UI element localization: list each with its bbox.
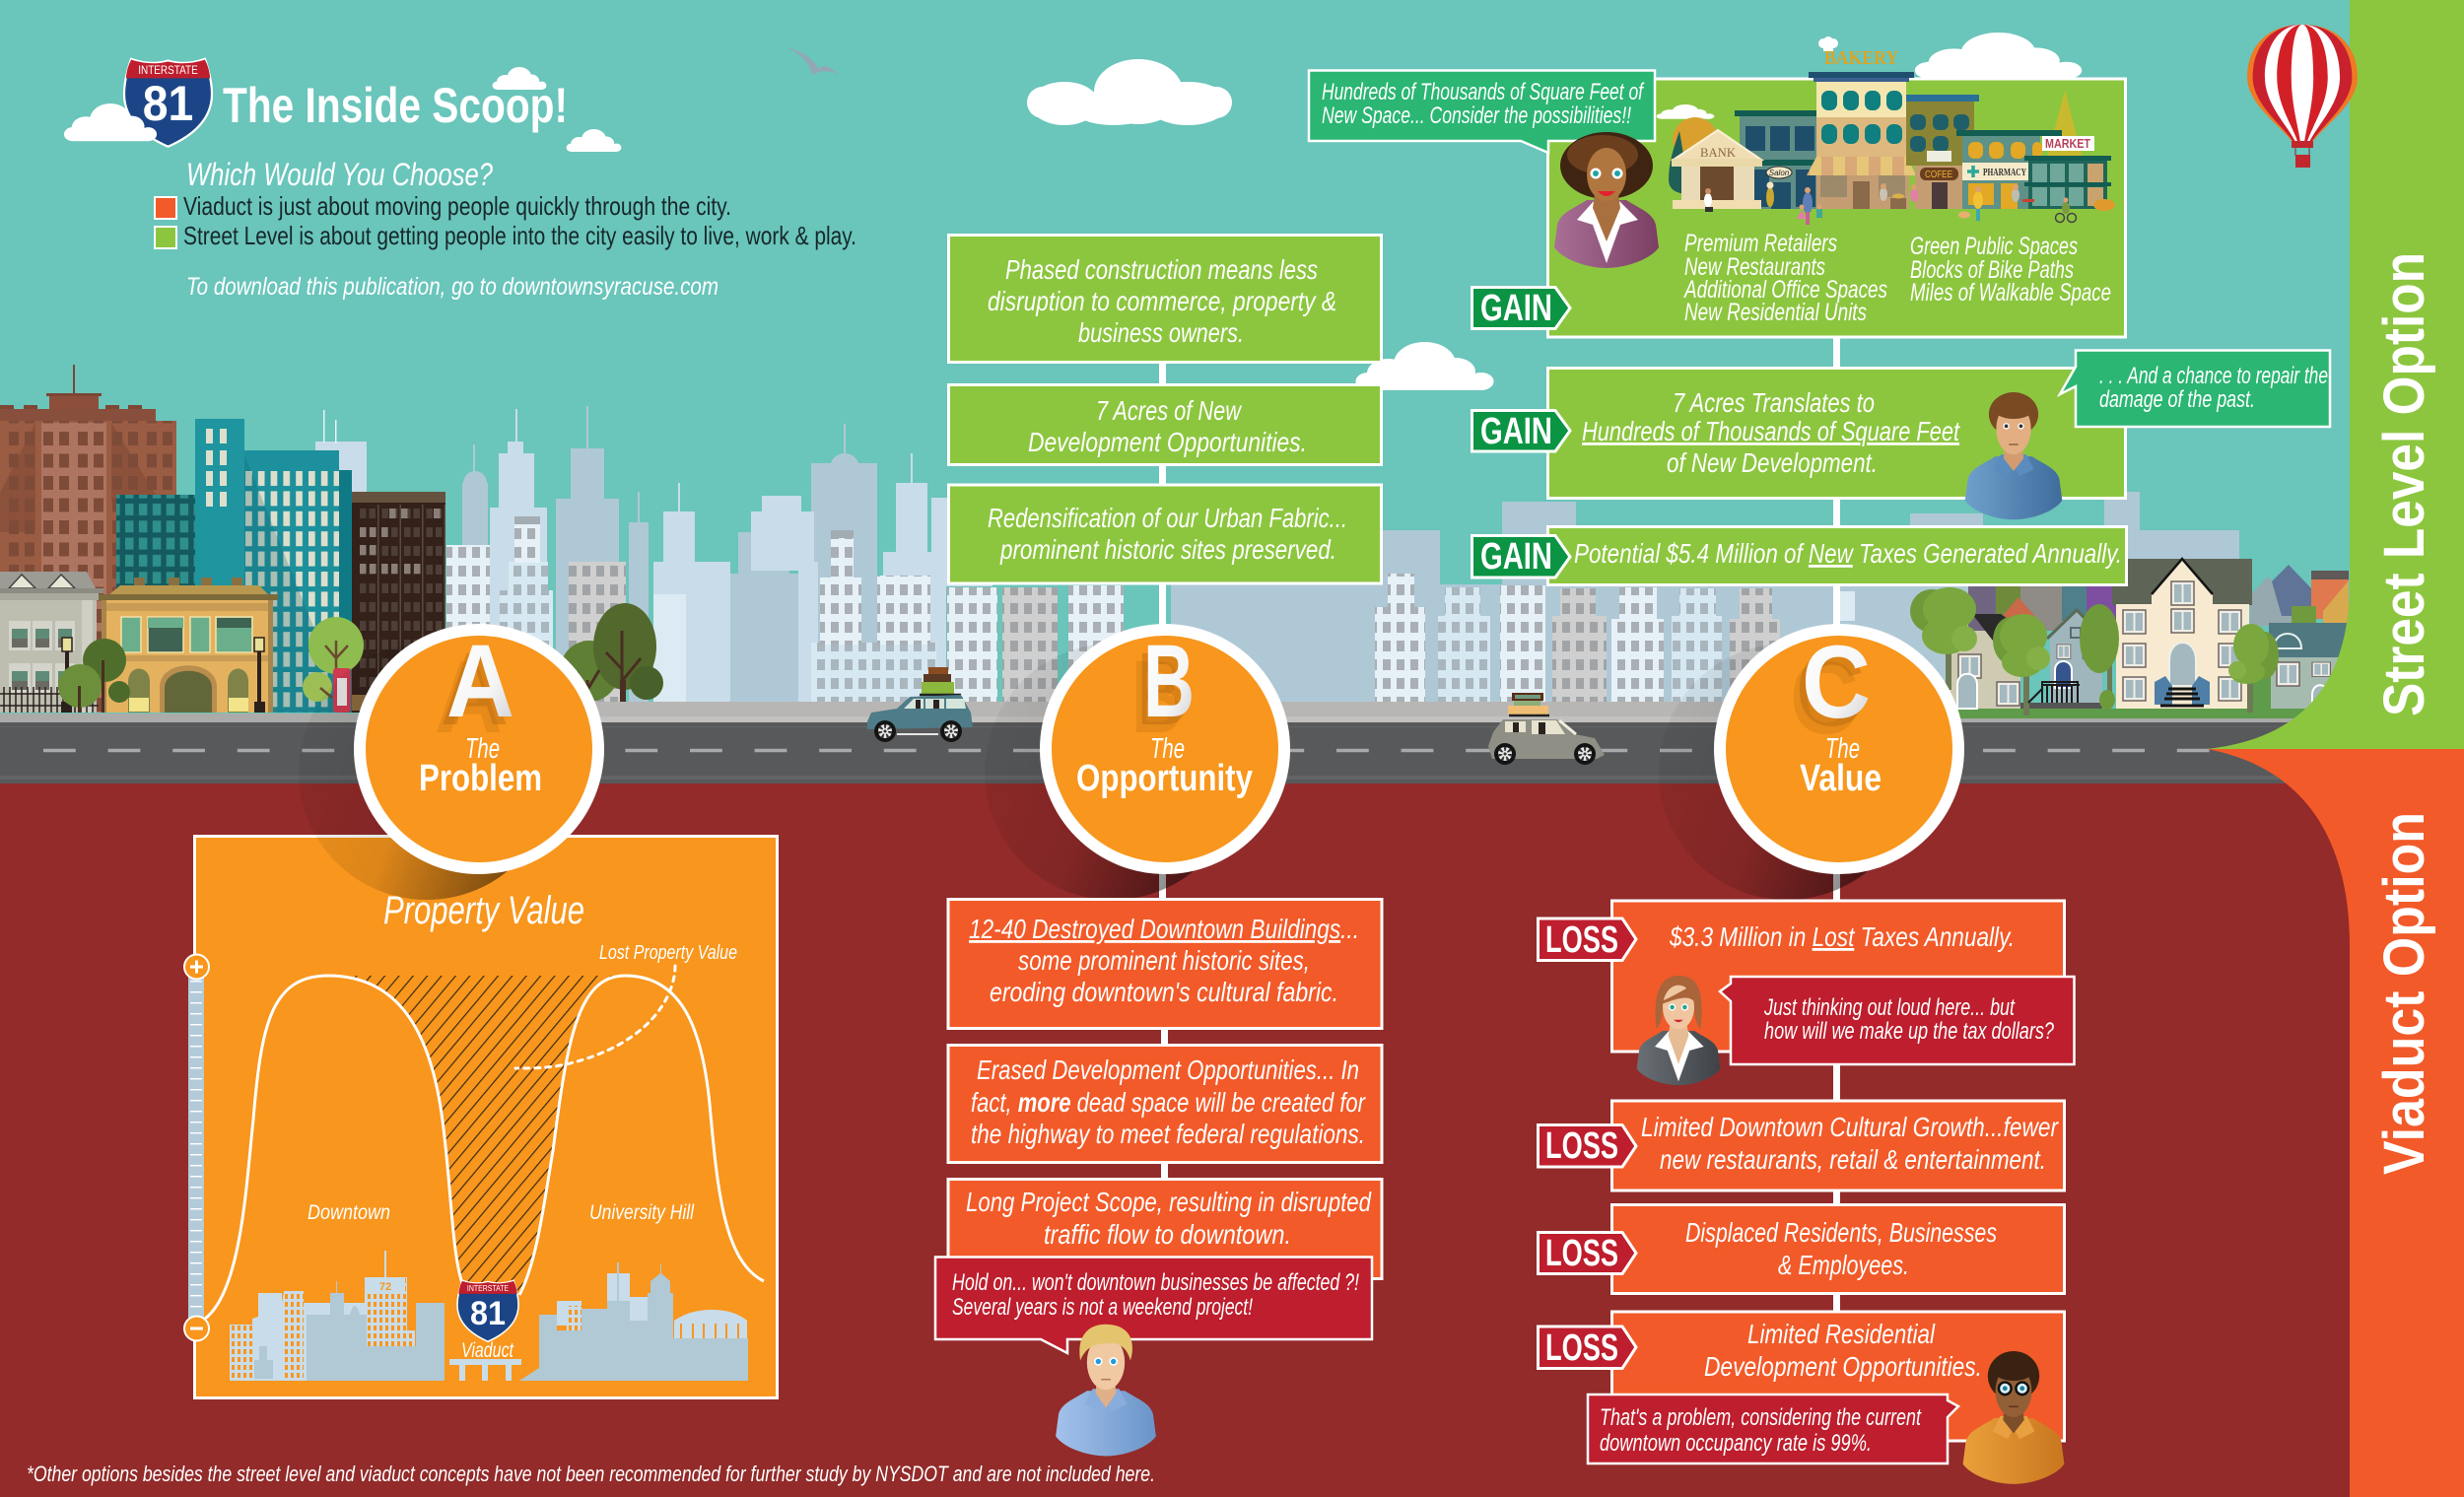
box: displaced residents: Displaced Residents, Businesses — [1685, 1217, 1997, 1248]
callout: repair the past: . . . And a chance to repair the — [2099, 363, 2328, 389]
person: blond man — [1056, 1325, 1156, 1456]
tan house — [1950, 614, 2045, 709]
roadway — [0, 702, 2365, 783]
sky background — [0, 0, 2464, 788]
loss connectors — [1833, 1191, 1840, 1311]
lamp posts — [61, 638, 265, 713]
gain tag 2: GAIN — [1480, 411, 1552, 452]
box: limited residential — [1612, 1312, 2064, 1441]
box: new space with town illustration: Miles of Walkable Space — [1910, 279, 2111, 306]
box: limited residential: Development Opportunities. — [1704, 1351, 1982, 1382]
opportunity: Opportunity — [1076, 758, 1253, 799]
loss tag 3: LOSS — [1545, 1233, 1618, 1274]
box: destroyed buildings: eroding downtown's cultural fabric. — [990, 977, 1338, 1007]
panel: street level value — [1309, 36, 2330, 585]
hatched lost value area — [328, 976, 625, 1295]
box: phased construction: business owners. — [1078, 317, 1244, 348]
tan shop building — [99, 578, 278, 713]
letter C: C — [1802, 625, 1871, 740]
panel: opportunity risks — [935, 899, 1382, 1456]
problem: Problem — [419, 758, 542, 799]
left trees — [58, 639, 130, 713]
box: redensification: Redensification of our Urban Fabric... — [988, 503, 1347, 533]
box: seven acres: 7 Acres of New — [1096, 395, 1242, 426]
letter A: A — [441, 632, 509, 747]
viaduct option label: Viaduct Option — [2372, 812, 2436, 1175]
box: destroyed buildings — [948, 899, 1382, 1029]
the: The — [465, 733, 500, 765]
badge A — [360, 624, 598, 868]
person: woman with curly hair — [1554, 132, 1659, 268]
callout: repair the past — [2060, 351, 2330, 427]
letter B: B — [1143, 624, 1195, 739]
downtown silhouette: 72 — [379, 1281, 391, 1293]
box: seven acres translate: Hundreds of Thousands of Square Feet — [1582, 416, 1960, 446]
value curve left — [205, 976, 462, 1319]
downtown silhouette — [230, 1251, 445, 1381]
salon sign — [1766, 167, 1792, 178]
chart shield: 81 — [470, 1295, 506, 1332]
box: destroyed buildings: 12-40 Destroyed Downtown Buildings... — [969, 914, 1359, 944]
grey neoclassical building — [0, 572, 103, 713]
street level option label: Street Level Option — [2372, 252, 2436, 716]
chart title: Property Value — [383, 889, 584, 932]
box: seven acres translate — [1547, 369, 2125, 499]
download note: To download this publication, go to downtownsyracuse.com — [186, 273, 719, 301]
interstate 81 shield — [124, 59, 212, 147]
gain tag 3: GAIN — [1480, 536, 1552, 578]
olive building — [1906, 95, 1979, 209]
letter B: B — [1131, 640, 1183, 755]
connectors — [1159, 338, 1840, 1311]
left downtown buildings — [0, 365, 663, 713]
box: new space with town illustration: Blocks of Bike Paths — [1910, 256, 2074, 284]
the: The — [1150, 733, 1185, 765]
box: erased opportunities: the highway to meet federal regulations. — [971, 1119, 1365, 1149]
footnote: *Other options besides the street level and viaduct concepts have not been recommended for further study by NYSDOT and are not included here. — [27, 1462, 1155, 1486]
box: long project scope — [948, 1179, 1382, 1279]
dotted leader — [515, 966, 675, 1068]
panel: viaduct value losses — [1538, 901, 2074, 1484]
brown high-rise — [0, 365, 176, 713]
loss tag 4: LOSS — [1545, 1327, 1618, 1369]
header — [64, 59, 856, 301]
loss tag 1: LOSS — [1545, 919, 1618, 961]
callout: possibilities — [1309, 71, 1655, 153]
value scale — [184, 954, 209, 1340]
box: new space with town illustration: New Residential Units — [1684, 299, 1867, 326]
box: lost taxes: $3.3 Million in Lost Taxes Annually. — [1669, 921, 2015, 952]
main title: The Inside Scoop! — [223, 78, 568, 133]
residential houses — [1910, 559, 2349, 715]
letter C: C — [1790, 641, 1859, 756]
light green tree and phone booth — [303, 617, 366, 713]
callout: tax dollars: Just thinking out loud here... but — [1763, 994, 2016, 1021]
box: phased construction: disruption to commerce, property & — [988, 286, 1336, 316]
label downtown: Downtown — [308, 1201, 390, 1224]
interstate 81 shield: 81 — [143, 76, 193, 131]
chart shield: INTERSTATE — [467, 1284, 510, 1293]
panel: property value chart — [184, 836, 777, 1397]
gain tag 1: GAIN — [1480, 288, 1552, 329]
stoop railing — [2028, 682, 2080, 703]
hot air balloon — [2247, 25, 2358, 168]
letter A: A — [435, 640, 503, 755]
label lost value: Lost Property Value — [599, 942, 737, 964]
callout: occupancy: That's a problem, considering the current — [1600, 1404, 1922, 1431]
pale window buildings — [446, 516, 1855, 714]
callout: hold on: Several years is not a weekend project! — [952, 1294, 1253, 1321]
box: phased construction — [948, 235, 1382, 363]
teal roof house — [2269, 623, 2349, 709]
callout: possibilities: New Space... Consider the possibilities!! — [1322, 102, 1631, 129]
person: woman in suit — [1637, 976, 1720, 1085]
box: erased opportunities: fact, more dead space will be created for — [971, 1087, 1366, 1118]
bird — [786, 47, 839, 75]
legend: street level: Street Level is about getting people into the city easily to live, work & play. — [183, 221, 856, 250]
wide teal building — [244, 450, 352, 713]
box: new space with town illustration: Premium Retailers — [1684, 230, 1837, 257]
the: The — [1825, 733, 1860, 765]
box: new taxes: Potential $5.4 Million of New Taxes Generated Annually. — [1574, 538, 2122, 569]
box: new space with town illustration: New Restaurants — [1684, 253, 1825, 281]
bank — [1672, 130, 1762, 209]
distant skyline — [315, 406, 2239, 719]
box: redensification: prominent historic sites preserved. — [999, 534, 1336, 565]
chart shield — [457, 1280, 518, 1341]
decorative clouds — [1027, 33, 2082, 390]
label university hill: University Hill — [589, 1201, 695, 1224]
market sign: MARKET — [2045, 136, 2090, 151]
badge B — [1046, 624, 1284, 868]
iron fence — [0, 687, 99, 713]
box: long project scope: Long Project Scope, resulting in disrupted — [966, 1187, 1372, 1217]
box: long project scope: traffic flow to downtown. — [1044, 1219, 1291, 1250]
plus — [184, 954, 209, 980]
pharmacy sign — [1962, 163, 2028, 180]
viaduct side banner — [2207, 749, 2464, 1497]
street trees beside circle A — [560, 603, 663, 713]
label viaduct: Viaduct — [461, 1339, 514, 1362]
person: man with curly hair — [1965, 392, 2062, 519]
legend: viaduct: Viaduct is just about moving people quickly through the city. — [183, 191, 731, 221]
callout: possibilities: Hundreds of Thousands of Square Feet of — [1322, 79, 1645, 105]
cream house — [2112, 559, 2252, 709]
connectors between boxes — [1161, 1029, 1168, 1178]
box: destroyed buildings: some prominent historic sites, — [1018, 945, 1310, 976]
bank: BANK — [1700, 145, 1737, 160]
box: new space with town illustration — [1547, 36, 2125, 337]
letter A: A — [446, 624, 514, 739]
box: limited cultural growth — [1612, 1101, 2064, 1191]
bakery building — [1807, 72, 1916, 209]
box: erased opportunities: Erased Development Opportunities... In — [977, 1055, 1359, 1085]
letter B: B — [1137, 632, 1189, 747]
box: new space with town illustration: Green Public Spaces — [1910, 233, 2078, 260]
box: limited residential: Limited Residential — [1747, 1319, 1936, 1349]
subtitle: Which Would You Choose? — [186, 157, 493, 192]
town illustration — [1657, 36, 2115, 225]
box: lost taxes — [1612, 901, 2064, 1052]
badge C — [1720, 625, 1958, 868]
box: displaced residents — [1612, 1204, 2064, 1293]
blue-grey house — [2020, 610, 2109, 709]
pharmacy building — [1956, 130, 2062, 209]
bakery sign: BAKERY — [1824, 47, 1898, 69]
teal shop — [1735, 110, 1817, 209]
car: grey hatchback — [1488, 693, 1605, 765]
dark brown tower — [352, 492, 445, 713]
box: seven acres translate: 7 Acres Translates to — [1673, 387, 1875, 418]
box: redensification — [948, 485, 1382, 583]
viaduct bridge — [449, 1359, 521, 1381]
circle shadows — [299, 644, 1915, 900]
value: Value — [1800, 758, 1882, 799]
callout: repair the past: damage of the past. — [2099, 386, 2255, 413]
university hill silhouette — [519, 1262, 748, 1381]
panel: opportunity benefits — [948, 235, 1382, 583]
box: new space with town illustration: Additional Office Spaces — [1682, 276, 1887, 304]
callout: hold on — [935, 1258, 1372, 1353]
dark teal building — [116, 495, 195, 713]
teal tower — [195, 419, 244, 713]
leafy trees — [1910, 587, 2279, 715]
minus — [184, 1317, 209, 1340]
callout: tax dollars: how will we make up the tax dollars? — [1764, 1018, 2054, 1045]
value curve right — [519, 976, 764, 1295]
coffee sign: COFEE — [1925, 170, 1952, 180]
box: limited cultural growth: new restaurants, retail & entertainment. — [1660, 1144, 2046, 1175]
callout: hold on: Hold on... won't downtown businesses be affected ?! — [952, 1269, 1359, 1296]
box: phased construction: Phased construction means less — [1005, 254, 1318, 285]
box: seven acres translate: of New Development. — [1667, 447, 1878, 478]
pedestrians — [1704, 181, 2115, 225]
box: erased opportunities — [948, 1045, 1382, 1163]
box: displaced residents: & Employees. — [1778, 1250, 1909, 1280]
callout: tax dollars — [1720, 977, 2074, 1064]
box: limited cultural growth: Limited Downtown Cultural Growth...fewer — [1641, 1112, 2059, 1142]
loss tag 2: LOSS — [1545, 1125, 1618, 1167]
far houses — [1968, 565, 2349, 709]
salon sign: Salon — [1769, 169, 1790, 177]
box: seven acres — [948, 384, 1382, 465]
header clouds — [64, 67, 621, 152]
callout: occupancy: downtown occupancy rate is 99%. — [1600, 1430, 1872, 1457]
box: new taxes — [1547, 526, 2127, 585]
pharmacy sign: PHARMACY — [1983, 168, 2027, 178]
box: seven acres: Development Opportunities. — [1028, 427, 1307, 457]
car: teal SUV — [867, 667, 973, 742]
interstate 81 shield: INTERSTATE — [138, 65, 198, 77]
market building — [2024, 156, 2111, 209]
ground background — [0, 783, 2464, 1497]
callout: occupancy — [1588, 1395, 1958, 1463]
chef hat — [1818, 36, 1838, 51]
person: man with glasses — [1963, 1351, 2064, 1484]
letter C: C — [1796, 633, 1865, 748]
street level side banner — [2207, 0, 2464, 749]
